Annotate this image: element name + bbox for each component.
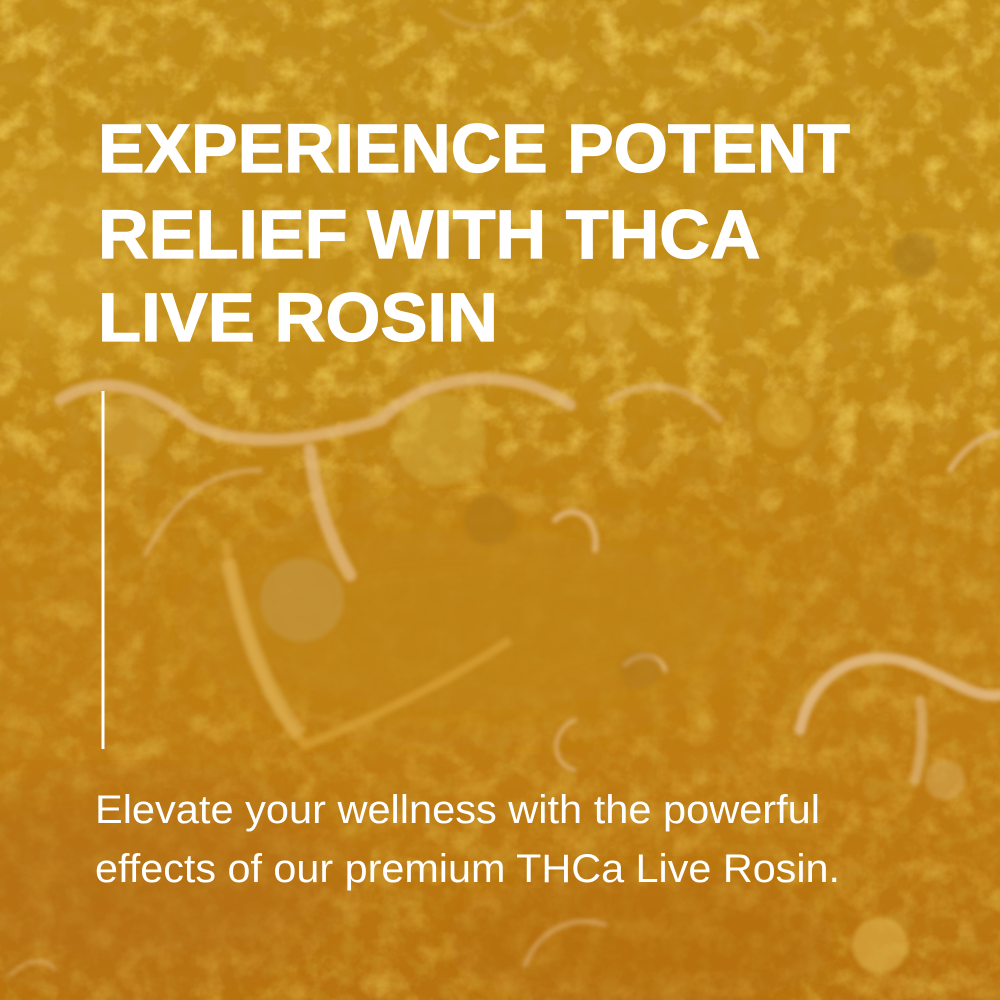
title: RELIEF WITH THCA [98,196,760,273]
body text: effects of our premium THCa Live Rosin. [95,847,840,891]
body text: Elevate your wellness with the powerful [95,788,820,832]
title: LIVE ROSIN [98,279,498,356]
folded resin ridge and bubbles [96,233,965,973]
vertical accent line [102,391,104,749]
title: EXPERIENCE POTENT [98,110,850,187]
